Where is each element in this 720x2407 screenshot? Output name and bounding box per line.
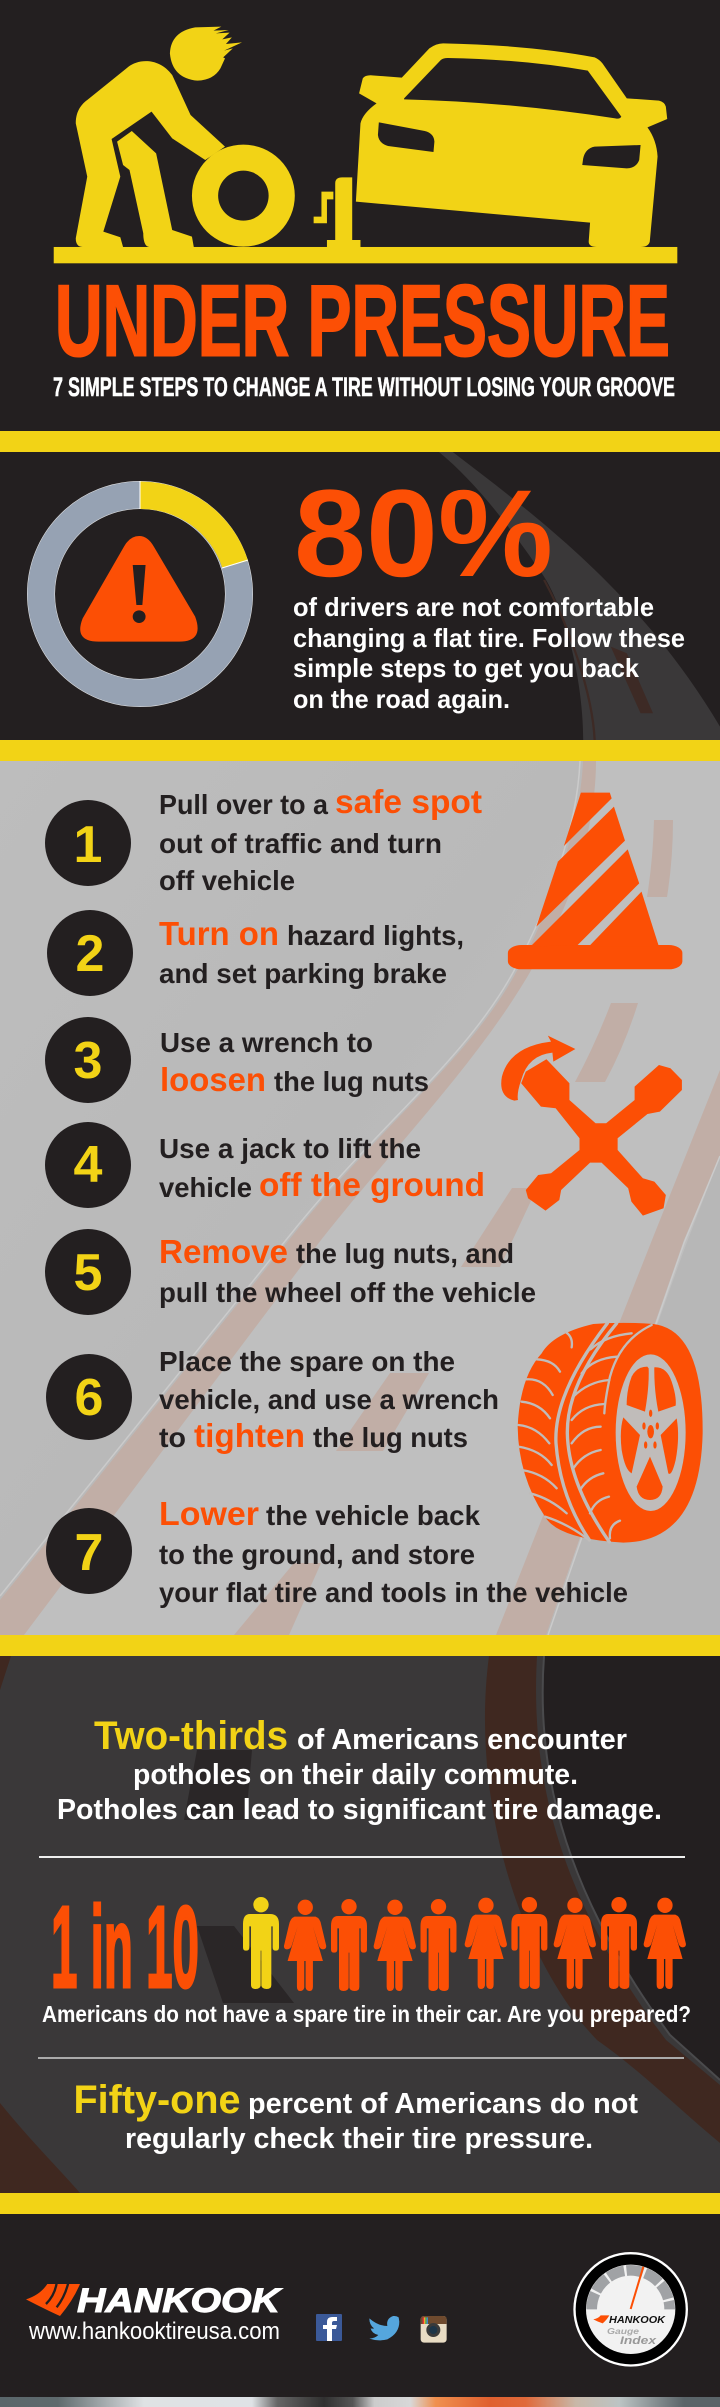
icon: car	[356, 43, 667, 247]
bottom gradient strip	[0, 2397, 720, 2407]
text: fifty-one percent: Fifty-one	[74, 2078, 240, 2122]
icon: tire and wheel	[518, 1323, 703, 1543]
text block: on the road again.	[293, 684, 510, 714]
badge: Gauge Index: HANKOOK	[609, 2314, 666, 2326]
step 3: loosen	[160, 1061, 266, 1098]
panel: header	[0, 0, 720, 431]
step 1: Pull over to a	[159, 789, 328, 820]
text block	[293, 592, 685, 714]
step 1: out of traffic and turn	[159, 828, 442, 859]
step 3	[45, 1017, 429, 1103]
panel: pothole and spare tire statistics: 1 in 10	[51, 1882, 199, 2012]
website url: www.hankooktireusa.com	[28, 2318, 280, 2345]
yellow divider band	[0, 431, 720, 452]
icon: instagram	[421, 2316, 447, 2343]
step 7: Lower	[159, 1495, 259, 1532]
step 1: off vehicle	[159, 865, 295, 896]
step 7: your flat tire and tools in the vehicle	[159, 1577, 628, 1608]
step 5: Remove	[159, 1233, 288, 1270]
icon: person front leg	[117, 131, 194, 247]
donut chart	[41, 481, 248, 693]
text: two-thirds: Potholes can lead to significant tire damage.	[57, 1794, 662, 1826]
badge: Gauge Index: Gauge	[607, 2327, 640, 2336]
step 5: pull the wheel off the vehicle	[159, 1277, 536, 1308]
step 2	[47, 910, 464, 996]
step 6: vehicle, and use a wrench	[159, 1384, 499, 1415]
logo: Hankook	[26, 2282, 283, 2320]
road background	[439, 452, 720, 740]
step 4: 4	[74, 1136, 103, 1194]
yellow divider band	[0, 1635, 720, 1656]
icon: traffic cone	[508, 793, 682, 969]
text: two-thirds: Two-thirds	[94, 1714, 288, 1758]
step 7	[46, 1495, 628, 1608]
step 2: Turn on	[159, 915, 279, 952]
step 5: the lug nuts, and	[296, 1238, 514, 1269]
ground bar	[54, 247, 677, 263]
text: fifty-one percent: percent of Americans do not	[248, 2088, 638, 2120]
text: fifty-one percent	[74, 2078, 638, 2155]
step 1: 1	[74, 816, 102, 874]
step 3: Use a wrench to	[160, 1027, 373, 1058]
icon: lug wrench with arrow	[501, 1036, 682, 1216]
step 5: 5	[74, 1244, 102, 1302]
icon: facebook	[316, 2314, 342, 2341]
step 4: vehicle	[159, 1172, 252, 1203]
text: fifty-one percent: regularly check their tire pressure.	[125, 2123, 593, 2155]
yellow divider band	[0, 2193, 720, 2214]
icon: twitter	[369, 2316, 399, 2340]
step 2: 2	[76, 925, 104, 983]
step 7: to the ground, and store	[159, 1539, 475, 1570]
panel: pothole and spare tire statistics	[0, 1656, 720, 2193]
panel: footer	[0, 2214, 720, 2397]
text: two-thirds: potholes on their daily commute.	[133, 1759, 578, 1791]
text: two-thirds: of Americans encounter	[297, 1724, 627, 1756]
road background	[0, 1656, 720, 2193]
step 6: the lug nuts	[313, 1422, 468, 1453]
step 1: safe spot	[335, 783, 482, 820]
big number: 80%	[294, 465, 553, 603]
icon: warning triangle	[80, 536, 198, 642]
badge: Gauge Index: Index	[620, 2335, 657, 2347]
step 7: the vehicle back	[266, 1500, 480, 1531]
step 2: hazard lights,	[287, 920, 464, 951]
text block: of drivers are not comfortable	[293, 592, 654, 622]
step 5	[45, 1229, 536, 1315]
icon: tire	[192, 145, 295, 247]
icon: person body	[76, 61, 225, 247]
step 4: Use a jack to lift the	[159, 1133, 421, 1164]
logo: Hankook: HANKOOK	[77, 2282, 283, 2320]
step 3: the lug nuts	[274, 1066, 429, 1097]
step 2: and set parking brake	[159, 958, 447, 989]
badge: Gauge Index	[573, 2252, 688, 2367]
step 6: to	[159, 1422, 186, 1453]
text block: simple steps to get you back	[293, 653, 640, 683]
step 6: Place the spare on the	[159, 1346, 455, 1377]
step 3: 3	[74, 1032, 102, 1090]
step 1	[45, 783, 482, 896]
step 4	[45, 1122, 485, 1208]
step 7: 7	[75, 1524, 103, 1582]
illustration: person changing a tire beside a jacked-up car	[54, 27, 677, 263]
pictogram: ten people	[243, 1897, 686, 1991]
step 6	[46, 1346, 499, 1454]
road background	[0, 761, 720, 1635]
step 6: 6	[75, 1369, 103, 1427]
text block: changing a flat tire. Follow these	[293, 623, 685, 653]
icon: jack	[314, 177, 360, 247]
yellow divider band	[0, 740, 720, 761]
text: two-thirds	[57, 1714, 662, 1826]
panel: 80 percent statistic	[0, 452, 720, 740]
step 4: off the ground	[259, 1166, 485, 1203]
step 6: tighten	[194, 1417, 305, 1454]
panel: seven steps	[0, 761, 720, 1635]
icon: person head	[170, 27, 242, 81]
